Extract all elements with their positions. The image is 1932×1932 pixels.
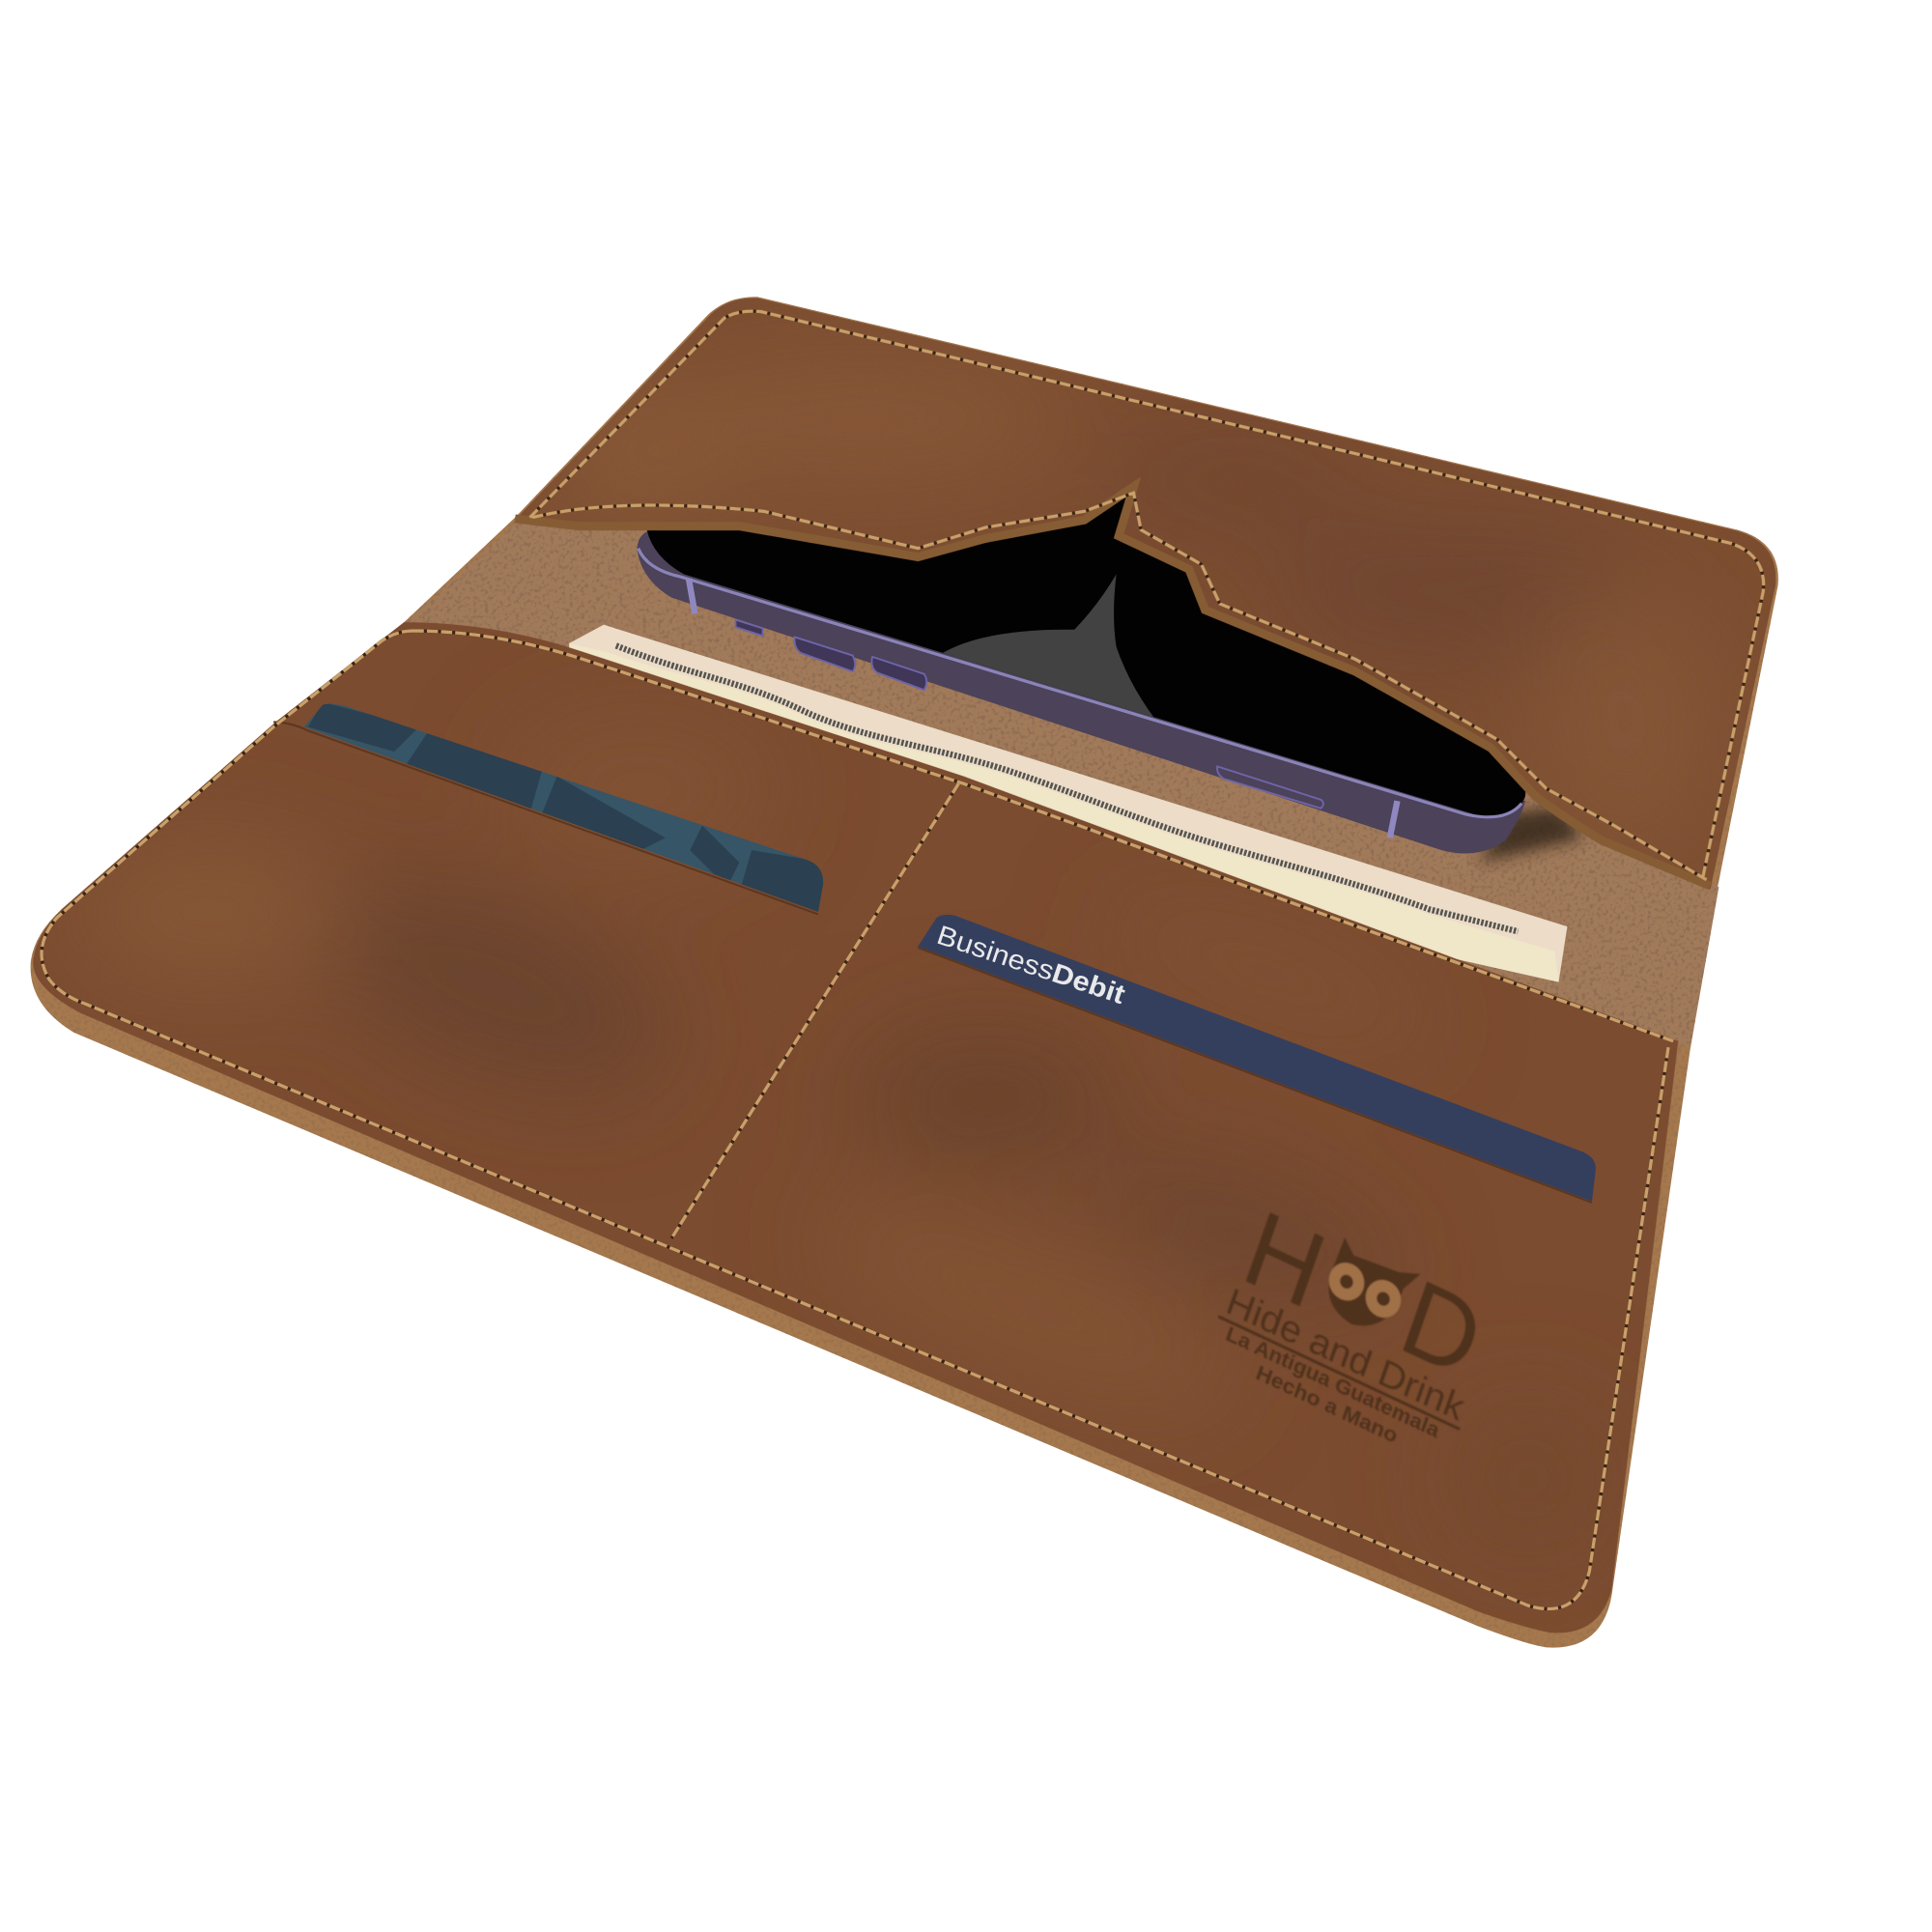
logo name: Hide and Drink bbox=[1221, 1281, 1470, 1430]
illustration: open leather wallet bbox=[31, 297, 1778, 1648]
phone body bbox=[637, 529, 1525, 854]
phone buttons bbox=[735, 620, 1323, 809]
flap cut edge bbox=[515, 487, 1710, 886]
logo owl bbox=[1318, 1236, 1421, 1345]
logo letter D: D bbox=[1387, 1258, 1496, 1401]
flap stitching bbox=[529, 311, 1764, 880]
lower panel stitching bbox=[42, 631, 1673, 1609]
phone bbox=[616, 474, 1583, 863]
card text: BusinessDebit bbox=[933, 920, 1129, 1009]
phone shadow bbox=[1479, 807, 1583, 863]
pocket slit shadows bbox=[273, 722, 1592, 1203]
interior suede lining bbox=[394, 511, 1731, 1060]
phone screen bbox=[647, 497, 1526, 815]
logo tagline: Hecho a Mano bbox=[1253, 1362, 1401, 1448]
logo location: La Antigua Guatemala bbox=[1223, 1322, 1442, 1442]
top flap with notch bbox=[493, 283, 1799, 912]
phone antenna bands bbox=[689, 579, 1397, 838]
banknote bbox=[569, 625, 1567, 982]
logo letter H: H bbox=[1231, 1188, 1339, 1332]
wallet silhouette: suede edge bbox=[25, 290, 1786, 1658]
embossed logo bbox=[1203, 1182, 1507, 1472]
phone frame highlight bbox=[639, 549, 1521, 817]
logo rule bbox=[1218, 1315, 1461, 1431]
lower panel with two pockets bbox=[25, 616, 1688, 1651]
lower right card bbox=[918, 915, 1596, 1202]
lower left card bbox=[304, 702, 826, 918]
